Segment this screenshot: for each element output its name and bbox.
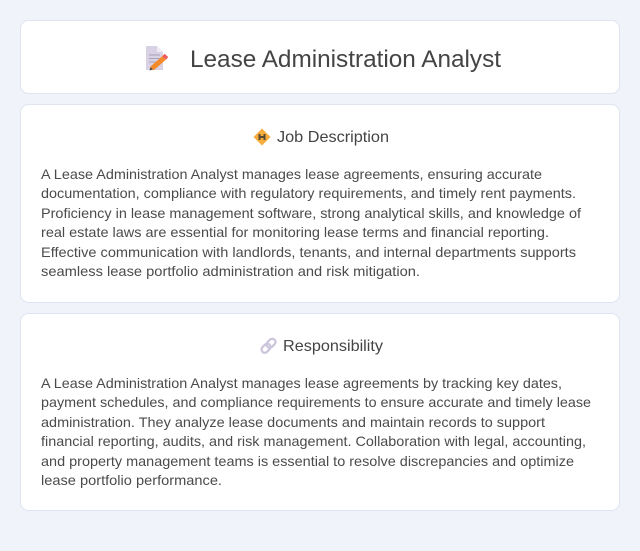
heading: responsibility: Responsibility xyxy=(283,338,383,355)
text block: responsibility: lease portfolio performance. xyxy=(41,472,222,488)
icon: chain link xyxy=(260,337,277,354)
panel: responsibility xyxy=(20,314,620,510)
title text: Lease Administration Analyst xyxy=(190,46,501,73)
text block: job description: Proficiency in lease management software, strong analytical skills, and knowledge of xyxy=(41,205,581,221)
text block: responsibility: administration. They analyze lease documents and maintain records to support xyxy=(41,414,545,430)
text block: job description xyxy=(41,166,581,279)
text block: job description: A Lease Administration Analyst manages lease agreements, ensuring accurate xyxy=(41,166,542,182)
panel: title xyxy=(20,20,620,94)
text block: job description: documentation, compliance with regulatory requirements, and timely rent payments. xyxy=(41,185,576,201)
text block: responsibility: and property management teams is essential to resolve discrepancies and optimize xyxy=(41,453,574,469)
heading: job description: Job Description xyxy=(277,129,389,146)
text block: responsibility: financial reporting, audits, and risk management. Collaboration with legal, accounting, xyxy=(41,433,586,449)
icon: document with pencil xyxy=(146,46,166,70)
text block: responsibility: A Lease Administration Analyst manages lease agreements by tracking key dates, xyxy=(41,375,562,391)
text block: job description: real estate laws are essential for monitoring lease terms and financial reporting. xyxy=(41,224,549,240)
text block: responsibility xyxy=(41,375,591,488)
panel: job description xyxy=(20,104,620,302)
text block: job description: seamless lease portfolio administration and risk mitigation. xyxy=(41,263,420,279)
text block: job description: Effective communication with landlords, tenants, and internal departments supports xyxy=(41,244,576,260)
icon: diamond sign xyxy=(254,128,270,146)
text block: responsibility: payment schedules, and compliance requirements to ensure accurate and timely lease xyxy=(41,394,591,410)
